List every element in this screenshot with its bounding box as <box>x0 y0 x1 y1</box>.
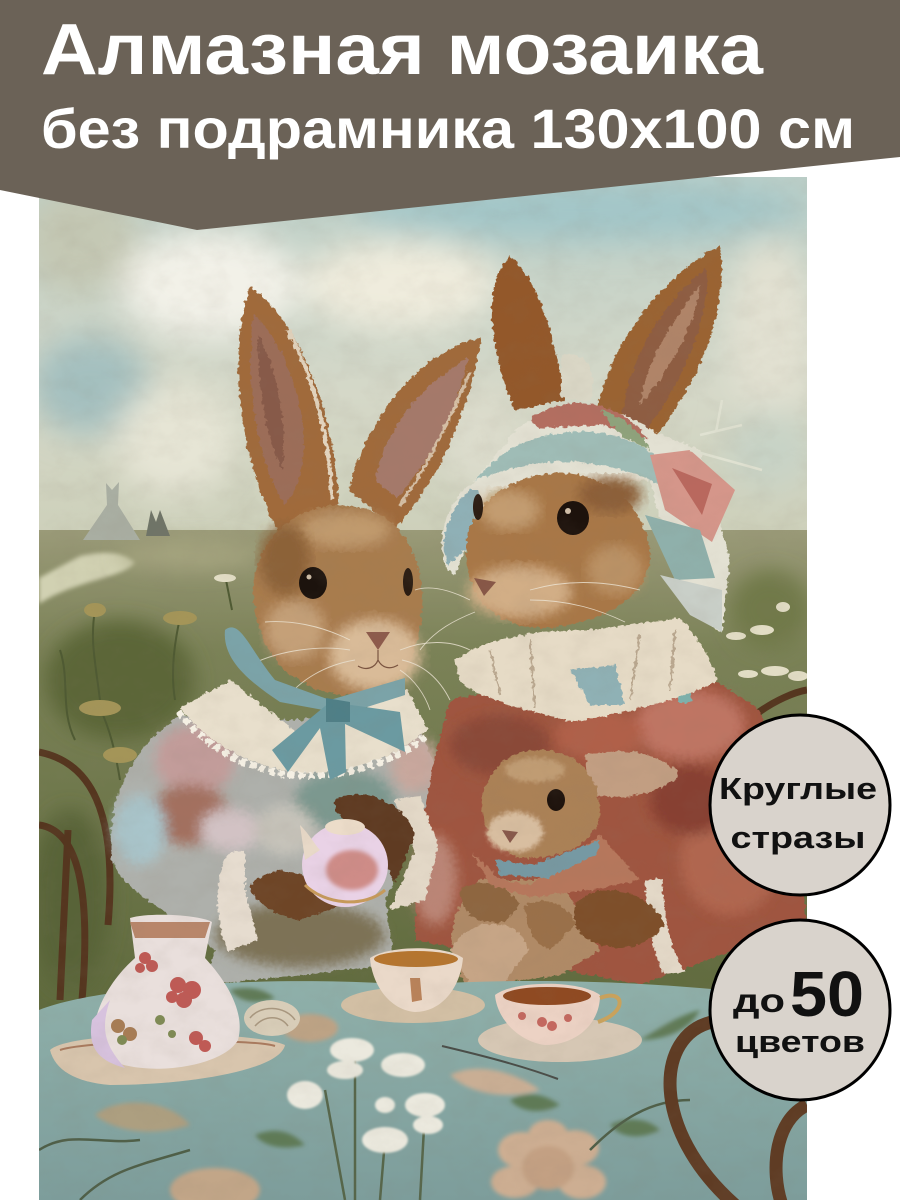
bentwood chairs <box>39 690 807 1000</box>
meadow <box>30 530 810 1010</box>
badge: up to 50 colours: цветов <box>735 1024 865 1059</box>
mother's dark paw <box>335 794 415 882</box>
badge: round rhinestones: стразы <box>730 820 866 855</box>
title line 1: Алмазная мозаика <box>41 10 764 90</box>
badge: up to 50 colours: 50 <box>790 958 864 1030</box>
left rabbit ears <box>238 287 481 545</box>
baby rabbit face <box>502 789 565 843</box>
spoon <box>442 1046 558 1079</box>
bonnet sprig <box>690 400 762 470</box>
right rabbit head <box>466 473 650 628</box>
left rabbit blue bow <box>225 627 405 780</box>
shell <box>244 1000 300 1036</box>
left rabbit head <box>253 505 422 696</box>
title line 2: без подрамника 130х100 см <box>41 97 855 160</box>
baby rabbit ear <box>585 751 680 797</box>
badge: up to 50 colours: до <box>733 982 785 1019</box>
baby rabbit collar <box>472 835 640 897</box>
right rabbit bonnet <box>442 354 735 632</box>
table branches <box>39 1100 690 1200</box>
right rabbit ears <box>492 246 722 455</box>
baby rabbit body <box>450 880 600 988</box>
sky with clouds <box>20 177 815 537</box>
badge: round rhinestones: Круглые <box>719 771 877 806</box>
left rabbit face <box>250 567 470 710</box>
right chair front <box>670 1022 807 1200</box>
right rabbit face <box>415 494 640 650</box>
left rabbit <box>111 287 481 985</box>
table with tablecloth <box>39 981 807 1200</box>
vase flowers <box>111 952 211 1052</box>
title banner <box>0 0 900 230</box>
small teapot <box>300 819 388 907</box>
right rabbit dress <box>390 670 805 985</box>
distant tent <box>83 482 170 540</box>
baby rabbit head <box>482 750 600 858</box>
painting: rabbits at tea party <box>20 177 815 1200</box>
floral vase <box>50 915 285 1085</box>
right rabbit <box>390 246 805 985</box>
right rabbit ruffled collar <box>455 618 716 722</box>
mother's large paw <box>575 890 665 948</box>
teacup back <box>341 948 485 1023</box>
badge: round rhinestones <box>710 715 890 895</box>
badge: up to 50 colours <box>710 920 890 1100</box>
peony on tablecloth <box>491 1120 606 1199</box>
left rabbit paw <box>250 871 342 920</box>
left rabbit dress <box>111 680 442 985</box>
meadow plants <box>60 575 232 780</box>
white flowers <box>325 1060 425 1200</box>
baby rabbit <box>335 750 680 988</box>
teacup front <box>478 984 642 1062</box>
